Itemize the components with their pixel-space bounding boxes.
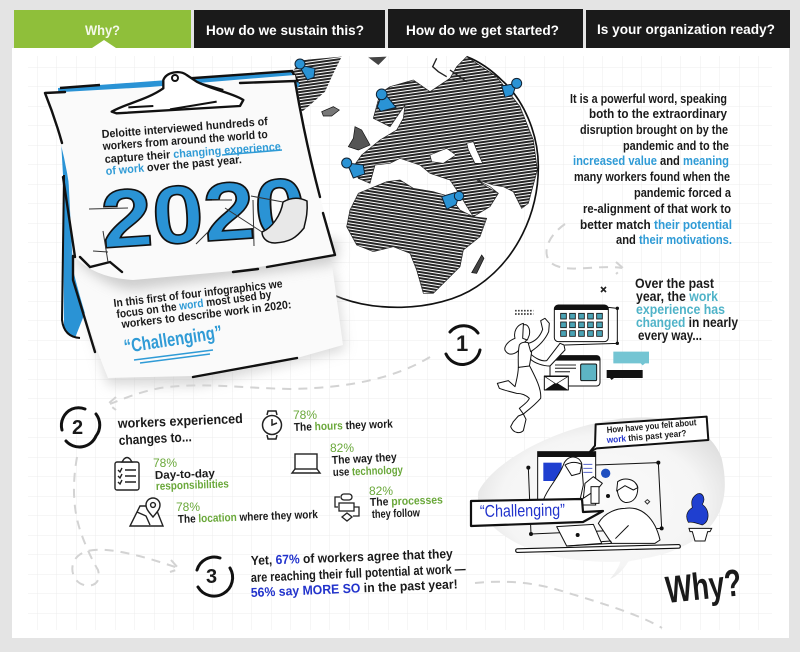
continent: Greenland [290,57,342,113]
stat: technology: The way they [332,452,398,467]
illustration: woman with app windows [497,305,649,433]
pin: Portugal [342,158,365,178]
desk [516,545,680,552]
globe outline [327,57,538,307]
Iceland [322,107,339,116]
text: powerful word paragraph [570,91,732,247]
big 2020 heading: 2020 [98,162,309,266]
text: powerful word paragraph: many workers found when the [574,169,730,184]
question text: How have you felt about [606,417,697,435]
blue dot [601,469,610,478]
pin: Greenland [295,59,315,80]
upper paper sheet [45,75,335,280]
Madagascar [472,255,484,273]
text: over the past year: year, the work [636,288,718,304]
text: 67% of workers: are reaching their full potential at work — [250,561,466,585]
text: over the past year [635,275,738,343]
man at desk [598,479,660,543]
tab: How do we get started? [388,9,583,48]
clipboard shadow [80,270,345,386]
grey speech bubble [478,417,725,579]
text: powerful word paragraph: and their motivations. [616,232,732,247]
step number 3: 3 [206,566,217,588]
stat: hours they work: 78% [293,408,317,422]
text: 67% of workers [250,546,466,600]
stat: location: The location where they work [178,509,319,526]
face mask on the zero [262,198,307,243]
paper callout: Challenging [123,322,224,363]
stat: day-to-day responsibilities: responsibilities [156,478,229,493]
stat: day-to-day responsibilities [115,456,229,493]
globe with hatched continents and pins [290,57,538,307]
stat: hours they work [262,408,394,439]
paper intro text: Deloitte interviewed hundreds of [101,116,268,141]
video window [538,452,596,505]
text: workers experienced changes to: changes to... [118,429,192,448]
step number 3 [197,557,233,596]
tab: How do we sustain this? [194,10,385,48]
icon: checklist [115,458,139,490]
text: powerful word paragraph: disruption brought on by the [580,122,728,137]
clipboard with paper [45,71,345,386]
paper outline strokes [45,81,335,377]
text: powerful word paragraph: pandemic forced a [634,185,732,200]
step number 1 [446,326,480,364]
stat: processes [335,484,443,521]
icon: laptop [292,454,320,473]
continent: Africa [347,180,487,293]
stat: hours they work: The hours they work [294,419,394,434]
continent: Eurasia [353,57,537,217]
text: powerful word paragraph: pandemic and to the [623,138,729,153]
illustration: video call speech bubble [478,417,725,579]
clipboard clip [112,72,243,113]
envelope [544,376,568,390]
stat: technology: 82% [330,441,354,455]
text: 67% of workers: Yet, 67% of workers agree that they [251,546,454,568]
paper intro text: workers from around the world to [101,129,268,153]
small x mark [601,287,606,292]
pin: Scandinavia [376,89,396,111]
lower paper sheet [68,170,343,378]
stat: location: 78% [176,500,200,514]
Russia north islands [368,57,387,65]
dashed arrow to step 3 [72,457,179,586]
upper paper sheet shadow [78,240,340,290]
dashed arrow to step 1 text [546,224,623,274]
clipboard blue board [58,71,300,338]
construction lines [89,196,283,262]
tab: How do we get started?: How do we get started? [406,22,559,38]
Challenging speech box: “Challenging” [480,501,565,521]
dots [515,311,533,314]
navigation tabs [14,9,790,48]
text: powerful word paragraph: re-alignment of that work to [583,201,731,216]
tab: Is your organization ready? [586,10,790,48]
text: powerful word paragraph: both to the extraordinary [589,106,728,121]
plant [687,493,712,541]
Challenging speech box [471,499,603,526]
dashed arrow to step 2 [108,357,430,410]
question text [605,417,697,445]
paper lower text: focus on the word most used by [116,289,273,321]
text: over the past year: experience has [636,301,725,317]
stat: processes: they follow [372,507,420,521]
paper lower text [113,278,292,331]
stat: day-to-day responsibilities: 78% [153,456,177,470]
frame lines [526,461,664,536]
text: over the past year: every way... [638,327,702,343]
step number 2: 2 [72,417,83,439]
icon: process flow [335,494,359,521]
teal chat bubble [613,352,649,365]
calendar window [554,305,619,345]
question speech box [590,417,708,452]
text: powerful word paragraph: better match their potential [580,217,732,232]
tab: Why? [14,10,191,48]
black sea and caspian sea [430,142,498,193]
decoration figure under clipboard [325,270,332,288]
tab: Is your organization ready?: Is your organization ready? [597,21,775,37]
stat: technology: use technology [333,465,404,479]
tab: Why?: Why? [85,22,120,38]
pin: East Asia [502,78,522,97]
United Kingdom [348,127,370,150]
black chat bubble [607,370,643,380]
question text: work this past year? [605,428,687,445]
woman on the call [543,457,602,500]
text: 67% of workers: 56% say MORE SO in the past year! [250,576,458,600]
text: workers experienced changes to: workers experienced [117,411,243,431]
step number 1: 1 [456,331,468,356]
text: workers experienced changes to [117,411,243,448]
text: powerful word paragraph: It is a powerful word, speaking [570,91,727,106]
woman [497,318,565,433]
stat: processes: The processes [370,494,443,509]
icon: watch [262,411,282,439]
pin: Egypt [442,191,464,209]
dashed decorative arc [475,582,662,628]
Why? handwritten heading: Why? [664,562,744,612]
tab: How do we sustain this?: How do we sustain this? [206,22,364,38]
paper intro text: capture their changing experience [104,141,281,166]
text: over the past year: changed in nearly [636,314,738,330]
icon: map pin [130,498,163,526]
paper lower text: In this first of four infographics we [113,278,283,310]
paper intro text [101,116,282,178]
small window [550,356,600,386]
paper intro text: of work over the past year. [105,154,242,178]
stat: location [130,498,319,526]
stat: day-to-day responsibilities: Day-to-day [155,468,216,482]
paper callout: Challenging: “Challenging” [123,322,224,358]
stat: processes: 82% [369,484,393,498]
stat: technology [292,441,404,479]
text: powerful word paragraph: increased value and meaning [573,153,729,168]
paper lower text: workers to describe work in 2020: [120,299,292,331]
text: over the past year: Over the past [635,275,714,291]
step number 2 [61,408,100,447]
laptop [557,524,612,546]
